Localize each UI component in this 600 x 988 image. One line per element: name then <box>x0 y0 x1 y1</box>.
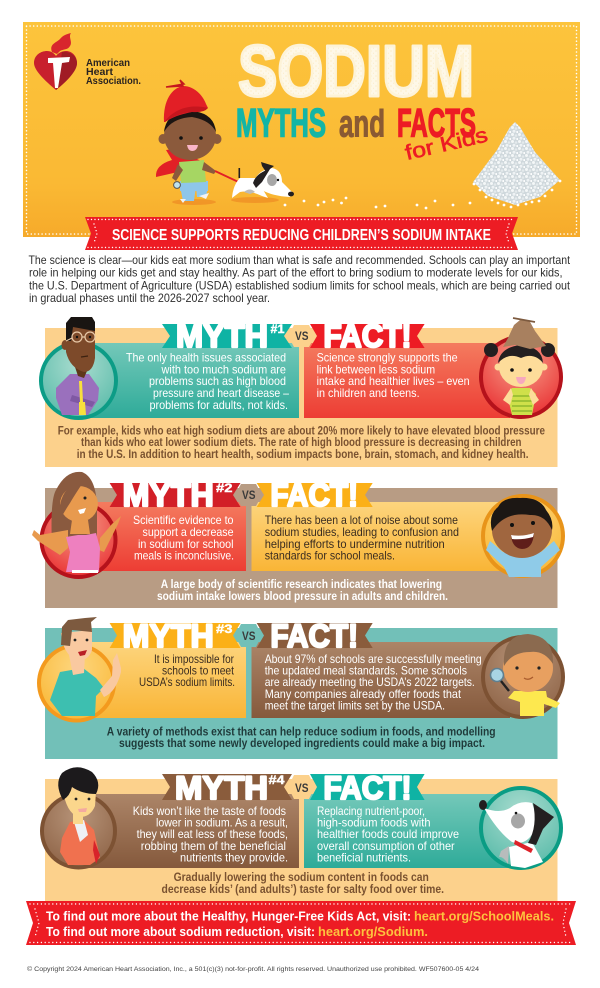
illustration: child with magnifier <box>483 634 563 717</box>
myth 1 text <box>126 350 289 412</box>
header banner <box>23 22 580 237</box>
copyright: © Copyright 2024 American Heart Association, Inc., a 501(c)(3) not-for-profit. All rights reserved. Unauthorized use prohibited. WF507600-05 4/24 <box>27 965 479 973</box>
subtitle: Myths and Facts for Kids: and <box>339 104 385 146</box>
summary 2: A large body of scientific research indicates that lowering <box>161 579 442 591</box>
myth 1 text: The only health issues associated <box>126 350 286 364</box>
summary 4: decrease kids’ (and adults’) taste for salty food over time. <box>162 884 444 896</box>
myth 3 ribbon <box>110 618 240 654</box>
fact 3 text: meet the target limits set by the USDA. <box>265 698 445 712</box>
fact 3 text: Many companies already offer foods that <box>265 687 462 701</box>
myth 3 ribbon: #3 <box>216 622 233 636</box>
myth 1 ribbon: #1 <box>270 322 285 336</box>
fact 3 text <box>265 652 482 712</box>
fact 1 text <box>317 350 470 400</box>
fact 1 text: link between less sodium <box>317 362 435 376</box>
subtitle: Myths and Facts for Kids: for Kids <box>403 124 490 165</box>
fact 4 text: healthier foods could improve <box>317 827 459 841</box>
illustration: girl with hat <box>481 318 561 417</box>
fact 2 text <box>265 513 459 562</box>
salt trail <box>284 197 471 209</box>
myth 4 ribbon <box>162 770 292 806</box>
myth 1 text: with too much sodium are <box>161 362 286 376</box>
summary 4 <box>162 872 444 896</box>
fact 1 ribbon: FACT! <box>324 318 412 354</box>
summary 2: sodium intake lowers blood pressure in adults and children. <box>157 591 448 603</box>
vs badge <box>235 624 262 647</box>
logo: American Heart Association: Heart <box>86 67 114 78</box>
logo: American Heart Association: Association. <box>86 76 141 87</box>
fact 4 text: high-sodium foods with <box>317 816 430 830</box>
fact 1 text: intake and healthier lives – even <box>317 374 470 388</box>
panel: myth 1 <box>41 317 561 467</box>
footer ribbon: To find out more about sodium reduction, visit: <box>46 924 315 939</box>
fact 4 text: overall consumption of other <box>317 839 455 853</box>
ribbon heading: SCIENCE SUPPORTS REDUCING CHILDREN’S SODIUM INTAKE <box>112 227 491 244</box>
fact 2 ribbon: FACT! <box>270 477 358 513</box>
fact 4 text: beneficial nutrients. <box>317 850 411 864</box>
summary 1: in the U.S. In addition to heart health, sodium impacts bone, brain, stomach, and kidney health. <box>77 449 528 461</box>
fact 2 text: helping efforts to undermine nutrition <box>265 537 445 551</box>
myth 1 text: problems such as high blood <box>149 374 286 388</box>
illustration: man pointing <box>39 617 121 720</box>
intro paragraph <box>28 253 571 305</box>
myth 2 text: support a decrease <box>142 525 234 539</box>
illustration: man with glasses <box>41 317 116 418</box>
myth 2 text: meals is inconclusive. <box>134 548 234 562</box>
summary 2 <box>157 579 448 603</box>
footer ribbon <box>26 901 576 945</box>
footer ribbon: To find out more about the Healthy, Hunger-Free Kids Act, visit: <box>46 908 411 924</box>
vs badge: VS <box>295 783 309 795</box>
myth 2 ribbon <box>110 477 240 513</box>
fact 4 text <box>317 804 459 864</box>
fact 3 text: are already meeting the USDA’s 2022 targets. <box>265 675 475 689</box>
illustration: salt pile <box>473 122 561 208</box>
fact 4 ribbon: FACT! <box>324 770 412 806</box>
logo: American Heart Association: American <box>86 58 130 69</box>
myth 3 text: schools to meet <box>162 664 235 678</box>
fact 3 ribbon: FACT! <box>270 618 358 654</box>
myth 3 text <box>139 652 235 689</box>
illustration: boy detective walking dog <box>156 80 294 205</box>
title: Sodium: SODIUM <box>238 32 474 112</box>
summary 4: Gradually lowering the sodium content in foods can <box>174 872 429 884</box>
vs badge: VS <box>242 490 256 502</box>
panel: myth 4 <box>42 767 561 905</box>
fact 3 text: the updated meal standards. Some schools <box>265 664 467 678</box>
myth 4 ribbon: MYTH <box>175 770 268 806</box>
illustration: dog <box>479 788 561 868</box>
myth 2 text: Scientific evidence to <box>133 513 234 527</box>
myth 4 text: lower in sodium. As a result, <box>156 816 288 830</box>
vs badge: VS <box>295 331 309 343</box>
subtitle: Myths and Facts for Kids: MYTHS <box>236 102 326 146</box>
fact 1 text: Science strongly supports the <box>317 350 458 364</box>
myth 1 text: pressure and heart disease – <box>153 386 289 400</box>
illustration: happy boy <box>483 496 563 577</box>
myth 1 ribbon <box>162 318 292 354</box>
myth 4 ribbon: #4 <box>268 773 285 787</box>
myth 1 text: problems for adults, not kids. <box>150 398 288 412</box>
fact 2 text: sodium studies, leading to confusion and <box>265 525 459 539</box>
intro paragraph: in gradual phases until the 2026-2027 school year. <box>29 291 270 305</box>
fact 2 text: standards for school meals. <box>265 548 395 562</box>
myth 4 text <box>133 804 288 864</box>
panel: myth 2 <box>32 472 563 608</box>
myth 2 ribbon: #2 <box>216 481 233 495</box>
myth 2 text <box>133 513 234 562</box>
summary 1 <box>58 426 545 461</box>
myth 2 text: in sodium for school <box>138 537 234 551</box>
summary 3: suggests that some newly developed ingredients could make a big impact. <box>119 738 485 750</box>
ribbon heading <box>85 217 518 250</box>
logo: American Heart Association <box>34 33 141 90</box>
summary 3 <box>107 726 496 750</box>
myth 4 text: Kids won’t like the taste of foods <box>133 804 286 818</box>
footer ribbon: heart.org/SchoolMeals. <box>414 908 554 924</box>
myth 4 text: they will eat less of these foods, <box>137 827 288 841</box>
fact 4 text: Replacing nutrient-poor, <box>317 804 425 818</box>
myth 4 text: nutrients they provide. <box>180 850 288 864</box>
summary 1: than kids who eat lower sodium diets. The rate of high blood pressure is decreasing in children <box>81 437 522 449</box>
myth 3 text: It is impossible for <box>154 652 234 666</box>
vs badge <box>288 325 315 347</box>
myth 3 ribbon: MYTH <box>123 618 214 654</box>
illustration: woman in coral jacket <box>42 767 115 868</box>
fact 2 text: There has been a lot of noise about some <box>265 513 458 527</box>
panel: myth 3 <box>39 617 563 759</box>
fact 1 text: in children and teens. <box>317 386 420 400</box>
myth 4 text: robbing them of the beneficial <box>141 839 286 853</box>
vs badge: VS <box>242 631 256 643</box>
summary 3: A variety of methods exist that can help reduce sodium in foods, and modelling <box>107 726 496 738</box>
fact 3 text: About 97% of schools are successfully meeting <box>265 652 482 666</box>
subtitle: Myths and Facts for Kids: FACTS <box>397 102 476 146</box>
vs badge <box>288 775 315 799</box>
myth 3 text: USDA’s sodium limits. <box>139 675 235 689</box>
footer ribbon: heart.org/Sodium. <box>318 924 428 939</box>
vs badge <box>235 484 262 506</box>
illustration: woman with long hair <box>32 472 121 577</box>
myth 1 ribbon: MYTH <box>176 318 268 354</box>
subtitle: Myths and Facts for Kids <box>236 102 490 165</box>
myth 2 ribbon: MYTH <box>123 477 214 513</box>
